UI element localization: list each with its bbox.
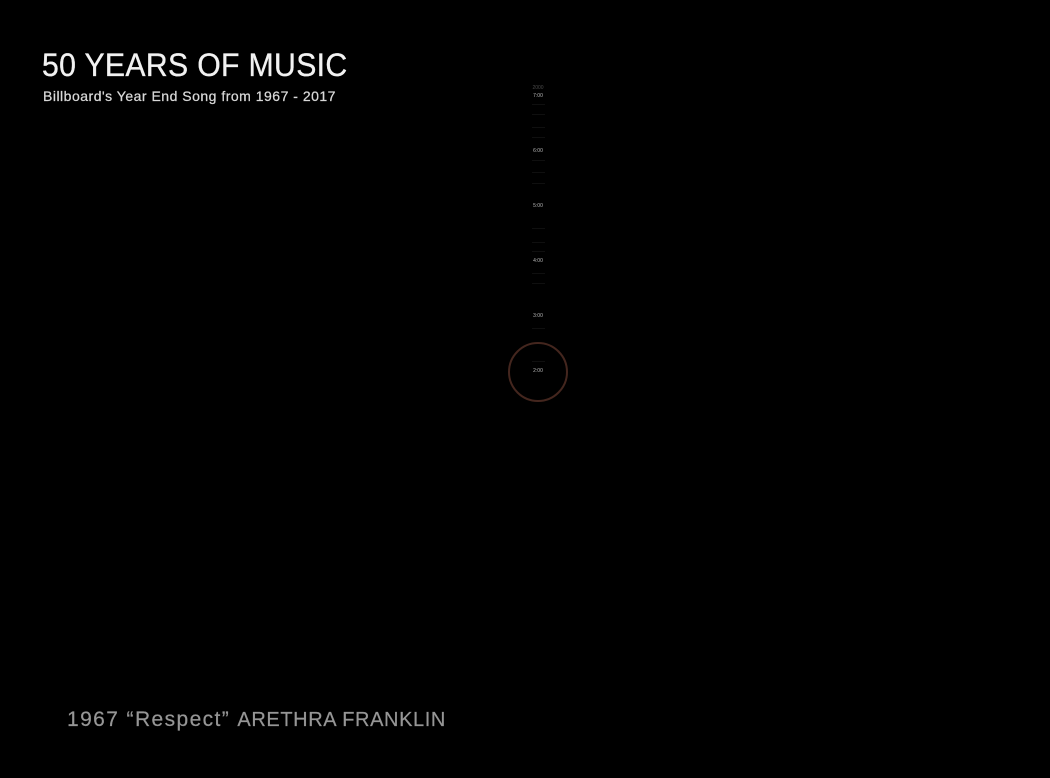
tick label 2:00: 2:00 — [533, 368, 543, 374]
song duration circle — [508, 342, 568, 402]
axis: song duration — [532, 85, 544, 374]
tick label 7:00: 7:00 — [533, 93, 543, 99]
tick label 4:00: 4:00 — [533, 258, 543, 264]
axis heading: 2000 — [532, 85, 544, 91]
tick label 6:00: 6:00 — [533, 148, 543, 154]
tick label 3:00: 3:00 — [533, 313, 543, 319]
song caption: 1967 “Respect” ARETHRA FRANKLIN — [67, 708, 446, 731]
tick label 5:00: 5:00 — [533, 203, 543, 209]
title: 50 YEARS OF MUSIC — [42, 47, 348, 83]
subtitle: Billboard's Year End Song from 1967 - 2017 — [43, 88, 336, 104]
